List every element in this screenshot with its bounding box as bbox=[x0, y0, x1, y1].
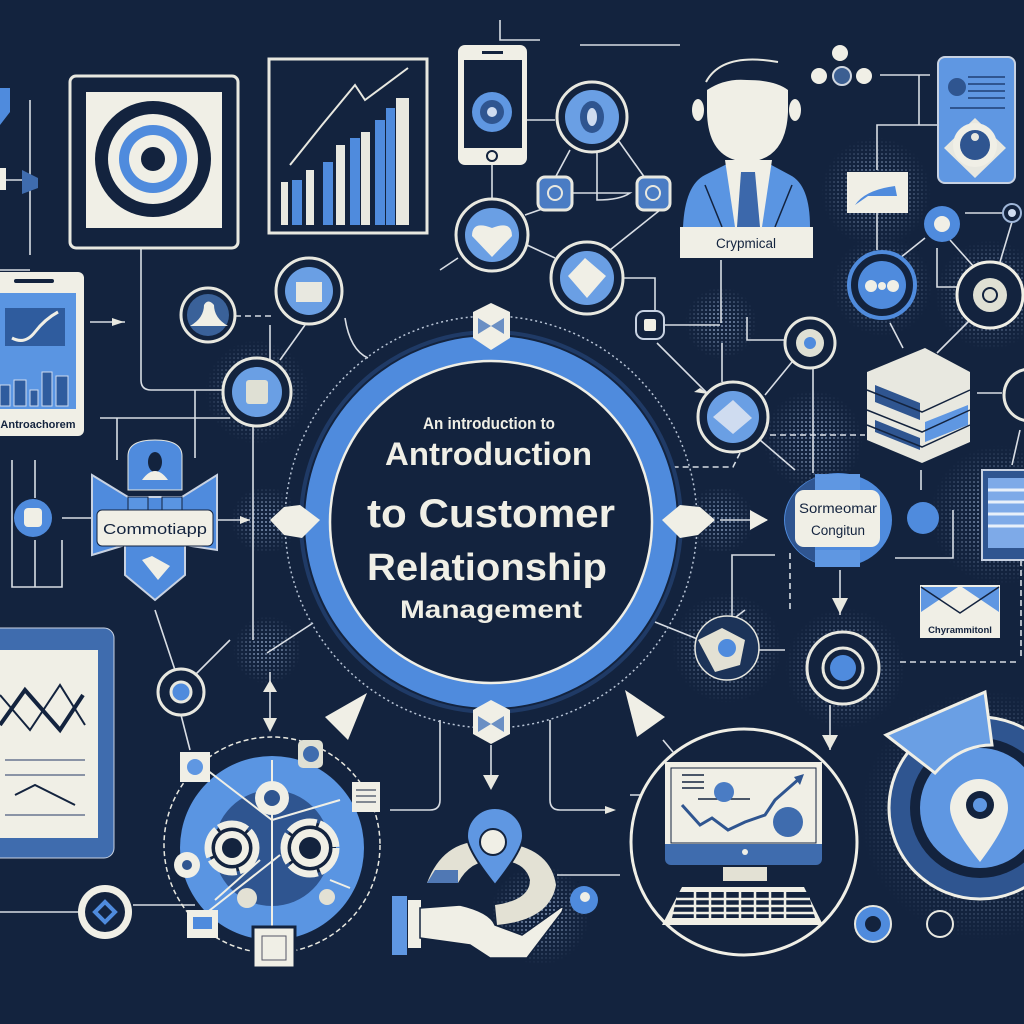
icon: tablet top right bbox=[938, 57, 1015, 183]
node icons left bbox=[14, 258, 342, 537]
icon: hand and pin bbox=[392, 808, 598, 958]
panel: target icon bbox=[70, 76, 238, 248]
panel: computer bbox=[631, 729, 857, 955]
icon: top-right dots bbox=[811, 45, 872, 85]
badge: customer bbox=[750, 473, 939, 567]
panel: lower left tablet bbox=[0, 628, 114, 858]
icon: book stack bbox=[867, 348, 970, 463]
title: to Customer bbox=[367, 492, 615, 536]
gears panel bbox=[164, 737, 380, 968]
title: Relationship bbox=[367, 547, 607, 589]
badge: customer: Congitun bbox=[811, 523, 865, 538]
arrows bbox=[112, 318, 848, 814]
title: Management bbox=[400, 596, 583, 624]
title: An introduction to bbox=[423, 414, 555, 433]
panel: left tablet: Antroachorem bbox=[0, 419, 76, 431]
icon: smartphone bbox=[458, 45, 527, 165]
node: left small bbox=[158, 669, 204, 715]
icon: right edge circle bbox=[1004, 369, 1024, 421]
node: bottom right bbox=[855, 906, 953, 942]
icon: document card bbox=[847, 172, 908, 213]
title bbox=[367, 414, 615, 624]
panel: shield badge: Commotiapp bbox=[103, 521, 207, 538]
panel: left tablet bbox=[0, 272, 84, 436]
central ring bbox=[270, 303, 715, 744]
icon: right edge card bbox=[982, 470, 1024, 560]
icon: businessman: Crypmical bbox=[716, 236, 776, 251]
icon: envelope bbox=[920, 585, 1000, 638]
node cluster: lower right bbox=[695, 616, 879, 704]
triangles bbox=[325, 690, 665, 740]
title: Antroduction bbox=[385, 436, 592, 472]
right icon nodes bbox=[636, 204, 1023, 452]
panel: shield badge bbox=[92, 440, 217, 600]
icon: businessman bbox=[680, 60, 813, 258]
node icons cluster bbox=[456, 82, 670, 314]
icon: envelope: Chyrammitonl bbox=[928, 625, 992, 636]
icon: left edge marks bbox=[0, 88, 38, 194]
panel: bar chart bbox=[269, 59, 427, 233]
icon: map pin disc bbox=[886, 692, 1024, 899]
badge: customer: Sormeomar bbox=[799, 501, 878, 516]
node: bottom left bbox=[78, 885, 132, 939]
